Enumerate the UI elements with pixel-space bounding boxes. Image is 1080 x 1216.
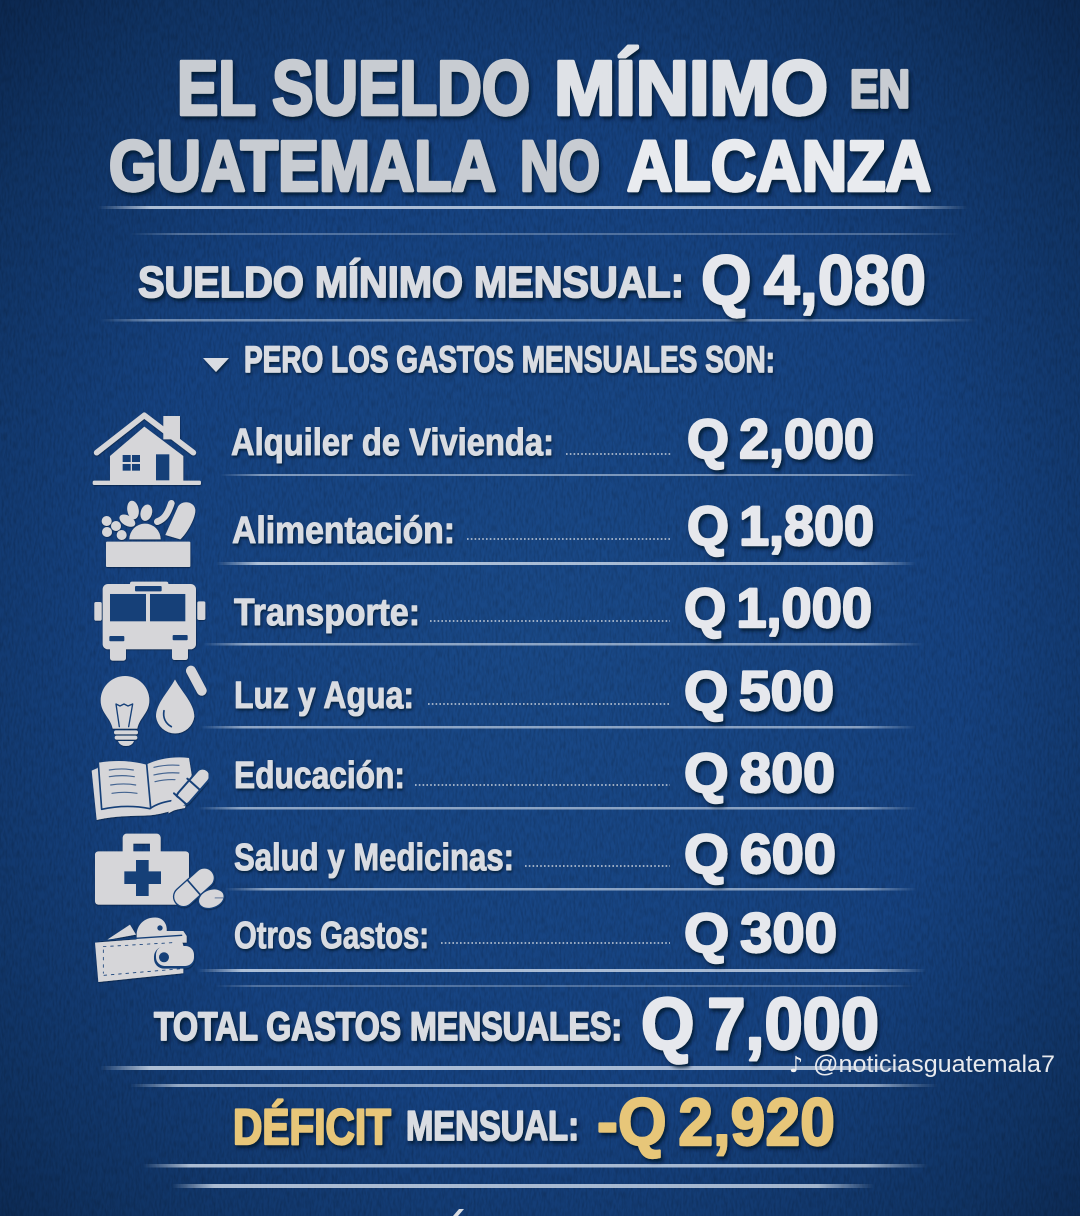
label and leader: Alquiler de Vivienda: xyxy=(231,422,554,464)
label and leader: Transporte: xyxy=(234,592,420,634)
icon: open book and pencil xyxy=(92,757,203,820)
cropped bottom line accent xyxy=(453,1209,464,1216)
icon: tiktok note: ♪ xyxy=(789,1053,803,1078)
title: GUATEMALA xyxy=(109,128,496,206)
expense row: transport xyxy=(94,576,872,661)
label and leader: Salud y Medicinas: xyxy=(234,837,514,879)
monthly deficit line xyxy=(233,1085,835,1160)
total expenses line xyxy=(154,984,879,1065)
expense row: other xyxy=(95,901,837,982)
amount: Q 300 xyxy=(684,901,837,964)
icon: wallet xyxy=(95,918,195,982)
amount: Q 500 xyxy=(684,659,834,722)
expense row: health xyxy=(95,822,836,913)
minimum wage line: Q 4,080 xyxy=(701,241,926,319)
icon: food basket xyxy=(102,500,195,567)
monthly deficit line: -Q 2,920 xyxy=(597,1085,835,1160)
monthly deficit line: MENSUAL: xyxy=(406,1102,579,1149)
decorative rules xyxy=(98,206,978,1188)
icon: bulb and water drop xyxy=(101,671,202,746)
minimum wage line xyxy=(138,241,926,319)
expense row: education xyxy=(92,741,835,820)
title: ALCANZA xyxy=(627,128,931,206)
amount: Q 600 xyxy=(684,822,836,885)
icon: house xyxy=(93,415,201,485)
title: EN xyxy=(850,60,910,119)
icon: bus xyxy=(94,582,205,661)
total expenses line: TOTAL GASTOS MENSUALES: xyxy=(154,1005,622,1049)
title: MÍNIMO xyxy=(554,46,828,132)
amount: Q 1,800 xyxy=(687,494,874,557)
watermark xyxy=(789,1051,1055,1078)
total expenses line: Q 7,000 xyxy=(641,984,879,1065)
expense row: rent xyxy=(93,407,874,485)
icon: first aid kit and pills xyxy=(95,834,228,913)
minimum wage line: SUELDO MÍNIMO MENSUAL: xyxy=(138,257,684,307)
title xyxy=(109,46,931,206)
label and leader: Educación: xyxy=(234,755,405,797)
title: NO xyxy=(520,128,600,206)
amount: Q 2,000 xyxy=(687,407,874,470)
amount: Q 800 xyxy=(684,741,835,804)
title: EL SUELDO xyxy=(177,46,530,132)
label and leader: Luz y Agua: xyxy=(234,675,414,717)
handle: @noticiasguatemala7 xyxy=(813,1051,1055,1078)
amount: Q 1,000 xyxy=(684,576,872,639)
label and leader: Otros Gastos: xyxy=(234,915,429,957)
expense row: food xyxy=(102,494,874,567)
subheading: monthly expenses: PERO LOS GASTOS MENSUALES SON: xyxy=(244,339,775,380)
expense row: utilities xyxy=(101,659,834,746)
label and leader: Alimentación: xyxy=(232,510,455,552)
monthly deficit line: DÉFICIT xyxy=(233,1099,391,1155)
